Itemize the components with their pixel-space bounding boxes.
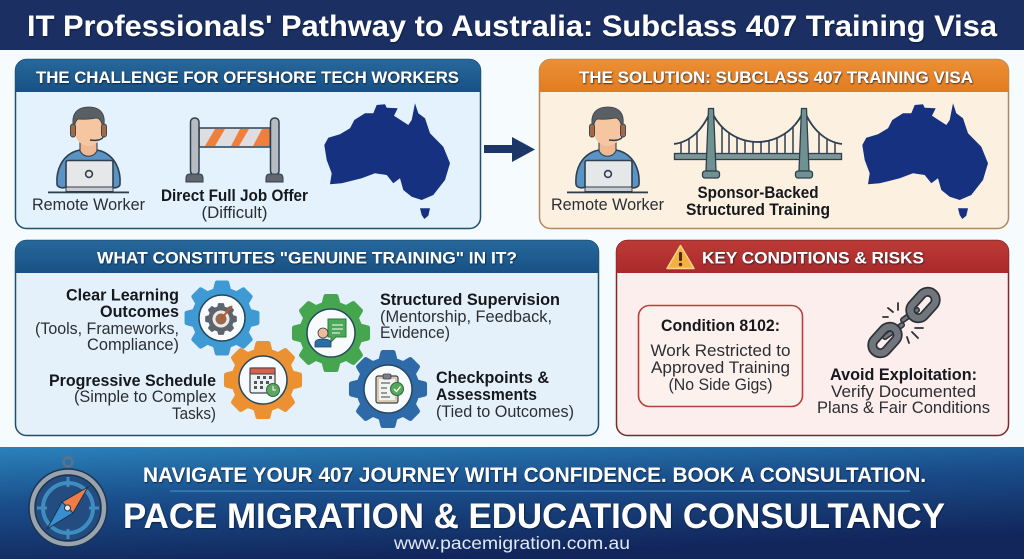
text: avoid exploitation: [817, 366, 990, 417]
label: sponsor-backed structured training: [686, 184, 830, 219]
text: checkpoints and assessments: (Tied to Outcomes): [436, 403, 574, 421]
website: www.pacemigration.com.au: [393, 533, 630, 553]
heading: solution: THE SOLUTION: SUBCLASS 407 TRAINING VISA: [579, 68, 973, 87]
label: remote worker: Remote Worker: [551, 196, 664, 214]
text: checkpoints and assessments: Checkpoints &: [436, 369, 549, 387]
text: clear learning outcomes: Clear Learning: [66, 286, 179, 304]
text: checkpoints and assessments: [436, 369, 574, 421]
gear: structured supervision: [294, 296, 368, 370]
footer banner: [0, 447, 1024, 559]
text: structured supervision: [380, 291, 560, 342]
text: clear learning outcomes: Compliance): [87, 336, 179, 354]
icon: remote worker: [567, 107, 648, 193]
icon: remote worker: [48, 107, 129, 193]
callout: condition 8102: Condition 8102:: [661, 317, 780, 335]
icon: suspension bridge: [674, 108, 842, 178]
text: clear learning outcomes: [35, 286, 179, 354]
label: direct full job offer: [161, 187, 309, 222]
label: sponsor-backed structured training: Sponsor-Backed: [698, 184, 818, 202]
text: checkpoints and assessments: Assessments: [436, 386, 537, 404]
callout: condition 8102: [638, 306, 802, 406]
icon: compass: [29, 458, 107, 547]
text: progressive schedule: [49, 372, 217, 423]
heading: challenge: THE CHALLENGE FOR OFFSHORE TECH WORKERS: [36, 68, 459, 87]
label: direct full job offer: Direct Full Job Offer: [161, 187, 309, 205]
map: Australia: [862, 103, 988, 219]
gear: checkpoints and assessments: [351, 352, 425, 426]
panel: genuine training: [16, 240, 598, 436]
callout: condition 8102: Work Restricted to: [650, 342, 790, 360]
panel: the challenge: [16, 60, 480, 228]
heading: key conditions: KEY CONDITIONS & RISKS: [702, 248, 924, 268]
heading: genuine training: WHAT CONSTITUTES "GENUINE TRAINING" IN IT?: [97, 248, 517, 268]
icon: road barrier: [186, 118, 283, 182]
title banner: IT Professionals' Pathway to Australia: Subclass 407 Training Visa: [27, 10, 997, 43]
text: structured supervision: Evidence): [380, 324, 450, 342]
gear: progressive schedule: [226, 343, 300, 417]
icon: broken chain: [869, 288, 939, 357]
panel: the solution: [540, 60, 1008, 228]
text: progressive schedule: Tasks): [172, 405, 216, 423]
panel: key conditions and risks: [616, 240, 1008, 436]
text: clear learning outcomes: (Tools, Frameworks,: [35, 320, 179, 338]
text: clear learning outcomes: Outcomes: [100, 303, 179, 321]
icon: warning triangle: [667, 246, 694, 268]
title banner: [0, 0, 1024, 50]
gear: clear learning outcomes: [187, 283, 257, 353]
text: structured supervision: Structured Supervision: [380, 291, 560, 309]
text: avoid exploitation: Avoid Exploitation:: [830, 366, 977, 384]
text: avoid exploitation: Plans & Fair Conditions: [817, 399, 990, 417]
map: Australia: [324, 103, 450, 219]
text: structured supervision: (Mentorship, Feedback,: [380, 308, 552, 326]
callout: condition 8102: Approved Training: [651, 359, 790, 377]
text: progressive schedule: Progressive Schedule: [49, 372, 216, 390]
label: sponsor-backed structured training: Structured Training: [686, 201, 830, 219]
label: remote worker: Remote Worker: [32, 196, 145, 214]
callout: condition 8102: (No Side Gigs): [668, 376, 772, 394]
arrow: [484, 137, 535, 162]
company name: PACE MIGRATION & EDUCATION CONSULTANCY: [123, 497, 945, 536]
call to action: NAVIGATE YOUR 407 JOURNEY WITH CONFIDENCE. BOOK A CONSULTATION.: [143, 464, 926, 487]
label: direct full job offer: (Difficult): [202, 204, 268, 222]
text: progressive schedule: (Simple to Complex: [74, 388, 217, 406]
text: avoid exploitation: Verify Documented: [831, 383, 976, 401]
